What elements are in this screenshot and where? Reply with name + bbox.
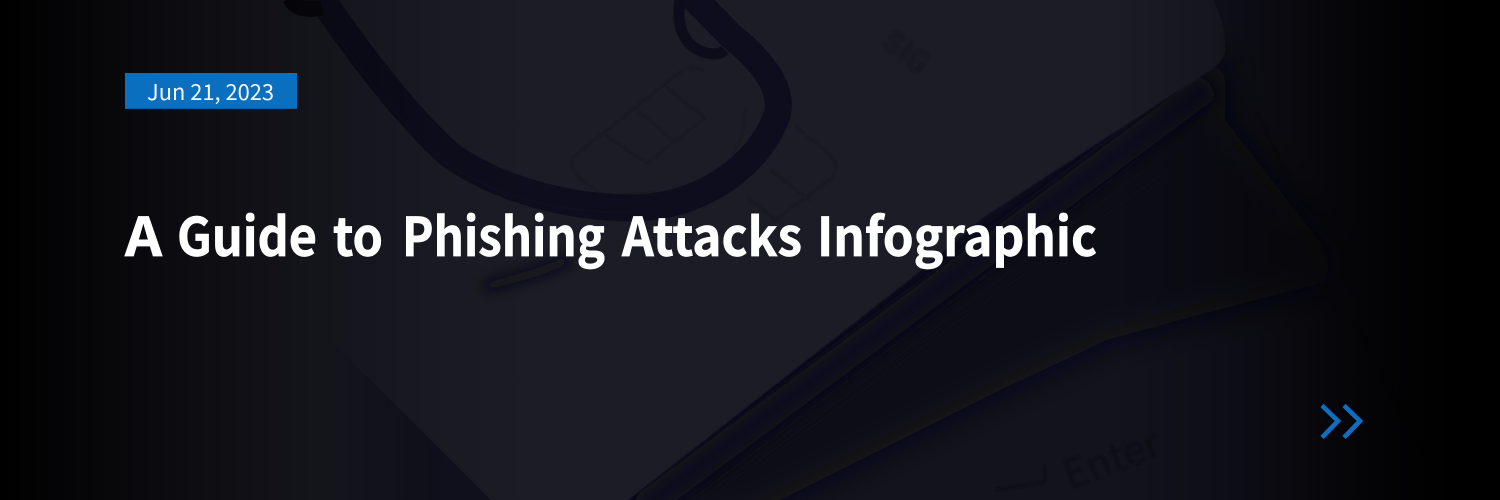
lower left corner shadow [320, 330, 496, 500]
phone edge stripes [650, 150, 1160, 500]
phone cast shadow [600, 50, 1333, 500]
title: to [333, 196, 383, 272]
title: Guide [177, 196, 317, 272]
eye of the hook [702, 28, 720, 47]
title: Infographic [817, 196, 1097, 272]
title [124, 196, 1097, 272]
phone edge band [640, 85, 1210, 500]
icon: double chevron arrow [1322, 406, 1360, 438]
phone sim outline [572, 68, 836, 220]
faint Enter key label: Enter [1054, 411, 1168, 500]
date badge [125, 73, 297, 109]
faint Enter key label [995, 411, 1168, 500]
soft shadow under hook [484, 258, 570, 287]
hook [290, 0, 778, 212]
title: A [124, 196, 163, 272]
key edge line [1256, 110, 1329, 260]
faint printed text on phone: SIG [874, 17, 941, 83]
title: Phishing [402, 196, 605, 272]
date text: Jun 21, 2023 [147, 75, 274, 107]
title: Attacks [621, 196, 802, 272]
